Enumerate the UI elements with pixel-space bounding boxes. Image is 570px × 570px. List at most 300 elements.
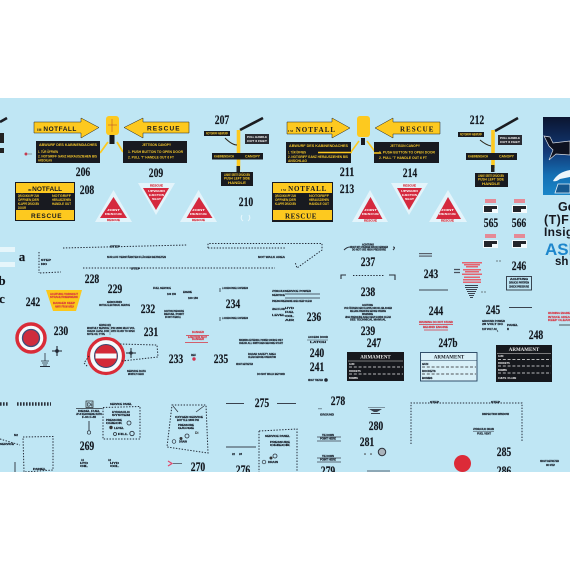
black panel second german: ABWURF DES KABINENDACHES	[289, 144, 349, 148]
black panel: german instructions: 2. NOTGRIFF GANZ HERAUSZIEHEN BIS	[38, 154, 98, 158]
dark stencil stack	[465, 285, 478, 298]
armament table 247b	[420, 352, 477, 381]
label bar: KABINENDACH	[468, 154, 488, 158]
lower numbers: 276	[236, 462, 251, 477]
numbers row two: 247b	[438, 335, 458, 350]
placard 213	[272, 182, 333, 222]
yellow warning placard 242: DANGER KEEP	[53, 301, 75, 305]
label box right: PULL HANDLE	[247, 136, 267, 139]
armament table 247	[347, 352, 404, 381]
dashed walkway lines	[39, 244, 322, 273]
numbers row two: 245	[486, 302, 501, 317]
warning triangles left	[95, 183, 217, 222]
stencils 236: ENGINE AREA KEEP CLEAR	[285, 299, 312, 303]
dashed service panel: PRESSURE	[106, 418, 122, 422]
small stencils middle	[99, 286, 286, 376]
dashed outline with crosshair	[84, 344, 158, 367]
red stencil 244: BEHIND ENGINE	[423, 325, 448, 329]
small stencils middle: PRESSURE	[272, 299, 285, 303]
black panel second german: 1. TÜR ÖFFNEN	[288, 150, 306, 154]
red warning stencil: DANGER	[192, 330, 204, 334]
numbers row two: 238	[361, 284, 376, 299]
stencils 245: I	[507, 327, 510, 331]
decal sheet background	[0, 98, 570, 472]
lower numbers: 281	[360, 434, 374, 449]
warning triangles right	[352, 183, 467, 222]
fuel placard 269: DIESEL FUEL	[78, 409, 101, 413]
small stencils lower: A1	[81, 458, 84, 462]
small stencils lower: 23	[239, 452, 243, 456]
armament table 248: BOMBS	[498, 369, 507, 372]
sheet title	[544, 200, 570, 268]
label bar: KABINENDACH	[214, 154, 234, 158]
numbers row one: 214	[403, 165, 418, 180]
boxed stencil 246: ACHTUNG	[510, 277, 528, 281]
jet silhouette	[544, 136, 570, 160]
fuel placard 269: F-34 F-35	[82, 415, 97, 419]
stencils 236: LATCH	[310, 340, 326, 344]
small stencils middle: SERVICE DATA	[127, 369, 146, 373]
boxed stencil 246: CHECK PRESSURE	[509, 284, 529, 288]
small stencils lower	[80, 404, 296, 468]
placard 208: RESCUE	[31, 213, 62, 220]
large dashed panel: FUEL VENT	[477, 432, 491, 436]
roundel 230	[17, 324, 45, 352]
small stencil icons 565 566	[483, 199, 527, 248]
dashed panel 276: SERVICE PANEL	[265, 434, 290, 438]
servicing text block: MONTHLY SERVICE	[87, 326, 109, 330]
placard 213: IM NOTFALL	[281, 185, 327, 193]
stencils 236: HYD	[285, 306, 294, 310]
dashed panel lower left	[0, 433, 53, 472]
armament table 247: BOMBS	[349, 377, 358, 380]
placard 208: HANDLE OUT	[52, 202, 72, 206]
armament table 248: ROCKETS	[498, 362, 510, 365]
numbers row two: 230	[54, 323, 68, 338]
stencils right of 278: TIE DOWN	[322, 433, 334, 437]
red dot 233: REF	[191, 353, 196, 357]
triangle down: UPWARD	[148, 190, 165, 193]
arrow: rescue: RESCUE	[147, 126, 181, 132]
numbers row two: 229	[108, 281, 123, 296]
large dashed panel: HYDRAULIC DRAIN	[473, 427, 494, 431]
stencils 236: FUEL	[285, 310, 295, 314]
small stencils middle: REFUEL POINT	[164, 312, 184, 316]
dashed service panel: HYDRAULIC	[112, 410, 130, 414]
red stencil 244	[419, 320, 453, 330]
stencil 237 with arrows	[344, 242, 394, 252]
red dot 285	[454, 455, 471, 472]
gray circle 281	[364, 448, 386, 456]
numbers row two: 239	[361, 323, 376, 338]
placard 213: DRÜCKKNOPF ZUM	[275, 193, 296, 198]
black panel: jettison canopy	[123, 141, 187, 163]
arrow rescue second: RESCUE	[400, 126, 434, 134]
small stencils lower: OIL	[80, 464, 89, 468]
black panel: german instructions: ABWURF DES KABINENDACHES	[39, 143, 98, 147]
triangle up right	[180, 190, 217, 222]
small stencils middle: DO NOT OVERFILL	[165, 315, 181, 319]
small stencils lower: OIL	[110, 464, 120, 468]
handle diagram 212	[458, 118, 522, 187]
stencils 245: GROUND POWER	[482, 319, 505, 323]
small stencils middle: CHECK ALL SWITCHES BEFORE START	[239, 341, 283, 345]
black panel second german: 2. NOTGRIFF GANZ HERAUSZIEHEN BIS	[288, 155, 349, 159]
small stencils lower: HYD	[110, 461, 119, 465]
arrow: im notfall	[34, 118, 99, 138]
numbers row one: 212	[470, 112, 484, 127]
label box right: OUT 6 FEET	[500, 141, 521, 144]
black panel second jettison: 2. PULL 'T' HANDLE OUT 6 FT	[379, 156, 428, 160]
black panel second jettison: JETTISON CANOPY	[390, 144, 421, 148]
label bottom: PUSH LEFT SIDE	[478, 178, 505, 182]
small stencils middle: L ACCESS PANEL FASTENERS	[222, 286, 248, 290]
faint bracket 210	[241, 215, 250, 221]
boxed stencil 246: DRUCK PRÜFEN	[509, 280, 529, 284]
black panel: german instructions: 1. TÜR ÖFFNEN	[38, 149, 58, 154]
placard 208	[15, 182, 75, 221]
triangle down	[138, 183, 175, 215]
red warning stencil	[185, 330, 209, 342]
red warning stencil: EJECTION SEAT	[188, 335, 207, 339]
stencils 243	[419, 253, 501, 298]
placard 213: HERAUSZIEHEN	[309, 198, 329, 202]
no step stencil: NICHT BETRETEN	[540, 459, 559, 463]
triangle up	[352, 190, 388, 222]
stencils 245: 115 VOLT AC	[482, 327, 497, 331]
numbers row two: 232	[141, 301, 155, 316]
small stencils lower: HYD	[80, 461, 88, 465]
label box right: OUT 6 FEET	[247, 140, 268, 143]
black panel: german instructions	[36, 141, 100, 163]
small stencils middle: CLEAR BEFORE OPERATION	[248, 355, 276, 359]
triangle up: RESCUE	[362, 213, 380, 216]
triangle up right: RESCUE	[192, 218, 205, 222]
placard 208: NOTGRIFF	[52, 194, 71, 198]
dashed service panel 270: GAUGE	[178, 426, 194, 430]
triangle up: JOINT	[107, 209, 121, 212]
dashed walkway lines: STEP	[131, 266, 140, 270]
triangle up right: JOINT	[441, 209, 455, 212]
stencil 239: WARNING	[362, 312, 373, 316]
black panel second german: ANSCHLAG	[288, 159, 307, 163]
stencils 236: ACCESS DOOR	[308, 335, 328, 339]
numbers row two: 241	[310, 359, 324, 374]
armament table 248: CHUTE / FLARE	[498, 377, 517, 380]
servicing text block	[87, 323, 135, 336]
dashed walkway lines: NOT WALK AREA	[258, 255, 285, 259]
fuel placard 269: JP-8 KEROSENE NATO	[76, 412, 102, 416]
large dashed panel: INSPECTION WINDOW	[482, 412, 510, 416]
triangle up right: RESCUE	[441, 218, 454, 222]
numbers row two: 231	[144, 324, 158, 339]
triangle up: RESCUE	[105, 213, 123, 216]
stencil 239	[344, 303, 392, 322]
stencils 245: 28 VOLT DC	[482, 322, 503, 326]
armament table 248: GUN	[498, 355, 504, 358]
numbers row two: 248	[529, 327, 544, 342]
dashed walkway lines: NO	[41, 262, 47, 266]
dashed walkway lines: STEP	[110, 244, 120, 248]
label box right: PULL HANDLE	[500, 137, 520, 140]
stencil 239: HIGH PRESSURE AREA KEEP HANDS CLEAR	[345, 315, 391, 319]
stencil 237 with arrows: NICHT MIT STARKEM DRUCK REINIGEN	[350, 245, 388, 249]
label bar: CANOPY	[499, 154, 515, 158]
dashed panel lower left: SERVICE	[0, 442, 14, 446]
label bottom: LINKE SEITE DRÜCKEN	[224, 172, 250, 177]
numbers row two: 228	[85, 271, 100, 286]
numbers row one: 206	[76, 164, 91, 179]
armament table 247b: GUN	[422, 362, 428, 366]
dashed service panel 270: PRESSURE	[178, 423, 194, 427]
stencil 239: VOR ÖFFNEN DER KLAPPE DRUCK ABLASSEN	[344, 305, 392, 310]
numbers row two: 233	[169, 351, 184, 366]
armament table 247b: BOMBS	[422, 376, 433, 380]
small stencils middle: LEVEL	[272, 313, 286, 317]
dashed panel 276: CHECK	[270, 443, 290, 447]
large dashed panel: STEP	[430, 400, 439, 404]
black panel second jettison	[374, 142, 439, 163]
black panel second german	[286, 142, 352, 163]
armament table 248: ARMAMENT	[509, 348, 540, 353]
red stencil 244: WARNING DO NOT STAND	[419, 320, 453, 324]
stencils right of 278: TIE DOWN	[322, 454, 334, 458]
servicing text block: PSI 2000 MAX VOL	[111, 326, 135, 330]
small stencils middle: NOTICE ELECTRICAL SERVICE	[99, 303, 130, 307]
numbers row two: 244	[429, 303, 444, 318]
placard 208: ÖFFNEN DER	[18, 197, 40, 202]
small stencils middle: SERVICE	[272, 293, 285, 297]
small stencils middle: L ACCESS PANEL FASTENERS	[222, 316, 248, 320]
label bottom: PUSH LEFT SIDE	[224, 176, 251, 180]
red warning stencil: DANGER	[192, 337, 204, 341]
placard 208: IM NOTFALL	[28, 186, 62, 193]
armament table 247: ARMAMENT	[360, 356, 391, 360]
stencil 239: SEE TECHNICAL MANUAL	[350, 318, 386, 322]
numbers row two: 242	[26, 294, 40, 309]
small red marker	[24, 152, 32, 156]
red stencil stack	[462, 262, 482, 283]
yellow handle	[100, 116, 123, 153]
stencils right of 278: POINT HERE	[320, 436, 336, 440]
small stencils middle: DO NOT WALK BEYOND	[257, 372, 285, 376]
triangle up	[95, 190, 132, 222]
small stencils middle: 100 150	[167, 292, 177, 296]
arrow: im notfall: IM NOTFALL	[37, 126, 77, 133]
numbers row two: 234	[226, 296, 241, 311]
stencils right of 278: POINT HERE	[320, 458, 336, 462]
black panel second jettison: 1. PUSH BUTTON TO OPEN DOOR	[379, 150, 436, 154]
arrow notfall second: IM NOTFALL	[288, 126, 336, 134]
numbers row two: 237	[361, 254, 376, 269]
large dashed panel	[411, 400, 522, 444]
lower numbers: 286	[497, 463, 512, 478]
logo panel	[543, 117, 570, 195]
lower numbers: 279	[321, 463, 336, 478]
dashed service panel 270	[167, 405, 208, 453]
stencil 238 bracket	[341, 275, 395, 280]
triangle up right	[429, 190, 467, 222]
placard 213: HANDLE OUT	[309, 202, 330, 206]
canopy rescue group 206 209	[24, 116, 189, 163]
dashed service panel 270: BOTTLE 1800 PSI	[177, 418, 199, 422]
bottom cover	[0, 472, 570, 570]
lower numbers: 278	[331, 393, 346, 408]
placard 208: KLAPPE DRÜCKEN	[18, 201, 39, 206]
yellow warning placard 242	[46, 290, 82, 311]
triangle down: RESCUE	[150, 184, 163, 188]
dashed panel 276: 1	[286, 443, 288, 447]
triangle up right: RESCUE	[439, 213, 457, 216]
placard 208: HERAUSZIEHEN	[52, 198, 71, 202]
pink chevron stencil	[168, 461, 182, 466]
dashed service panel: FILL	[118, 432, 129, 436]
red stencil 248: INTAKE AREA	[548, 315, 570, 319]
label bar: CANOPY	[245, 154, 261, 158]
triangle up right: JOINT	[192, 209, 206, 212]
triangle up: RESCUE	[364, 218, 377, 222]
triangle up right: RESCUE	[190, 213, 208, 216]
label box: NOTGRIFF ABWURF	[460, 132, 482, 136]
dashed walkway lines: STEP	[41, 258, 51, 262]
numbers row two: 243	[424, 266, 439, 281]
numbers row one: 211	[340, 164, 354, 179]
letters	[0, 249, 26, 306]
stencils right of 278: ..	[318, 407, 323, 410]
label bar	[466, 153, 517, 160]
red dot 233	[191, 353, 196, 361]
triangle up: JOINT	[364, 209, 378, 212]
yellow warning placard 242: AWAY FROM AREA	[55, 304, 74, 308]
no step stencil: NO STEP	[546, 463, 555, 467]
stencils 245: PANEL	[507, 323, 519, 327]
numbers row two: 236	[307, 309, 322, 324]
dashed panel 276: PRESSURE	[270, 440, 290, 444]
small stencils middle: WARNING EXTERNAL POWER SOURCE ONLY	[239, 338, 283, 342]
label bottom: LINKE SEITE DRÜCKEN	[478, 173, 504, 178]
servicing text block: NOTE OIL TYPE	[87, 332, 105, 336]
dashed service panel: SYSTEM	[112, 413, 130, 417]
servicing text block: SERVICE DATA	[99, 323, 111, 327]
small stencils middle: RADAR SAFETY AREA	[248, 352, 276, 356]
yellow handle second	[318, 116, 382, 153]
stencil 239: RELEASE PRESSURE BEFORE OPENING	[350, 309, 386, 313]
dashed service panel: SERVICE PANEL	[110, 402, 132, 406]
label bottom	[475, 173, 508, 187]
numbers row two: 247	[367, 335, 382, 350]
small stencils middle: FUEL SERVICE	[153, 286, 171, 290]
label box right	[498, 135, 522, 145]
dashed panel 276: DRAIN	[268, 460, 278, 464]
triangle down: EJECTION	[402, 194, 417, 197]
label box: NOTGRIFF ABWURF	[206, 132, 228, 136]
armament table 247: GUN	[349, 363, 355, 366]
stencils 236: OIL	[285, 314, 295, 318]
lower numbers: 269	[80, 438, 95, 453]
letters: a	[19, 249, 26, 264]
label box right	[245, 134, 269, 144]
logo badge	[555, 184, 570, 193]
armament table 248	[496, 345, 552, 382]
stencils 236: SERVICE POWER	[285, 289, 311, 293]
dashed service panel: CHECK	[106, 421, 122, 425]
numbers row one: 566	[512, 215, 527, 230]
numbers row one: 213	[340, 181, 355, 196]
tick bars	[0, 402, 51, 406]
numbers row one: 207	[215, 112, 230, 127]
no step stencil	[540, 459, 559, 467]
red stencil 248: KEEP CLEAR	[548, 318, 570, 322]
armament table 247: ROCKETS	[349, 370, 361, 373]
no-entry roundel 231	[88, 338, 124, 374]
small stencils middle: CAUTION PRESSURE	[164, 309, 184, 313]
stencils 236	[285, 289, 328, 344]
stencils right of 278: GROUND	[320, 412, 334, 416]
lower numbers: 285	[497, 444, 512, 459]
white stripes left	[0, 247, 15, 267]
ground symbol	[40, 353, 50, 366]
numbers row one: 208	[80, 182, 95, 197]
black panel: jettison canopy: JETTISON CANOPY	[142, 143, 172, 147]
placard 213: NOTGRIFF	[309, 194, 329, 198]
small stencils middle: 100 150	[188, 296, 199, 300]
numbers row one	[76, 112, 527, 230]
triangle down	[391, 183, 428, 215]
red stencil 248	[548, 311, 570, 325]
dashed panel lower left: N2	[14, 433, 19, 437]
numbers row one: 565	[484, 215, 499, 230]
armament table 247b: ROCKETS	[422, 369, 436, 373]
dashed walkway lines: NUR AUF VERSTÄRKTEN FLÄCHEN BETRETEN	[107, 255, 166, 259]
dashed service panel: LEVEL	[114, 426, 124, 430]
boxed stencil 246	[506, 276, 532, 290]
sheet title: (T)F	[544, 213, 569, 227]
canopy rescue group 211 214	[286, 116, 440, 163]
servicing text block: HYD FLUID TO SPEC	[111, 329, 135, 333]
dashed service panel 270: DRAIN	[179, 440, 187, 444]
lower numbers: 270	[191, 459, 205, 474]
triangle down: RESCUE	[403, 184, 416, 188]
lower numbers: 280	[369, 418, 383, 433]
swoosh	[553, 170, 570, 181]
small stencils middle: MONTHLY CHECK	[128, 372, 144, 376]
black panel: jettison canopy: 1. PUSH BUTTON TO OPEN DOOR	[128, 150, 184, 154]
fuel placard 269: Di	[87, 402, 93, 408]
arrow: rescue	[124, 118, 189, 138]
arrow notfall second	[287, 118, 350, 138]
placard 208: DRÜCKKNOPF ZUM	[18, 193, 39, 198]
crosshair symbol	[52, 346, 62, 356]
black panel: german instructions: ANSCHLAG	[38, 158, 52, 162]
numbers row two	[26, 254, 544, 374]
dashed service panel	[103, 402, 140, 439]
stencils 236: AIR	[285, 318, 294, 322]
label bottom: HANDLE	[482, 182, 501, 186]
numbers row one: 210	[239, 194, 253, 209]
stencils 245	[482, 308, 532, 332]
placard 213: KLAPPE DRÜCKEN	[275, 201, 296, 206]
small stencil 241: NICHT TRETEN	[308, 378, 323, 382]
stencil 237 with arrows: DO NOT USE HIGH PRESSURE	[352, 248, 386, 252]
placard 213: ÖFFNEN DER	[275, 197, 297, 202]
triangle down: SEAT	[152, 198, 162, 201]
yellow warning placard 242: ACHTUNG VORSICHT	[50, 292, 78, 296]
small stencils middle: GROUND	[107, 300, 122, 304]
placard 213: RESCUE	[285, 212, 317, 220]
dashed service panel 270: OXYGEN SERVICE	[175, 415, 203, 419]
dashed panel 276	[259, 429, 297, 472]
small stencils middle: ENGINE	[183, 290, 192, 294]
